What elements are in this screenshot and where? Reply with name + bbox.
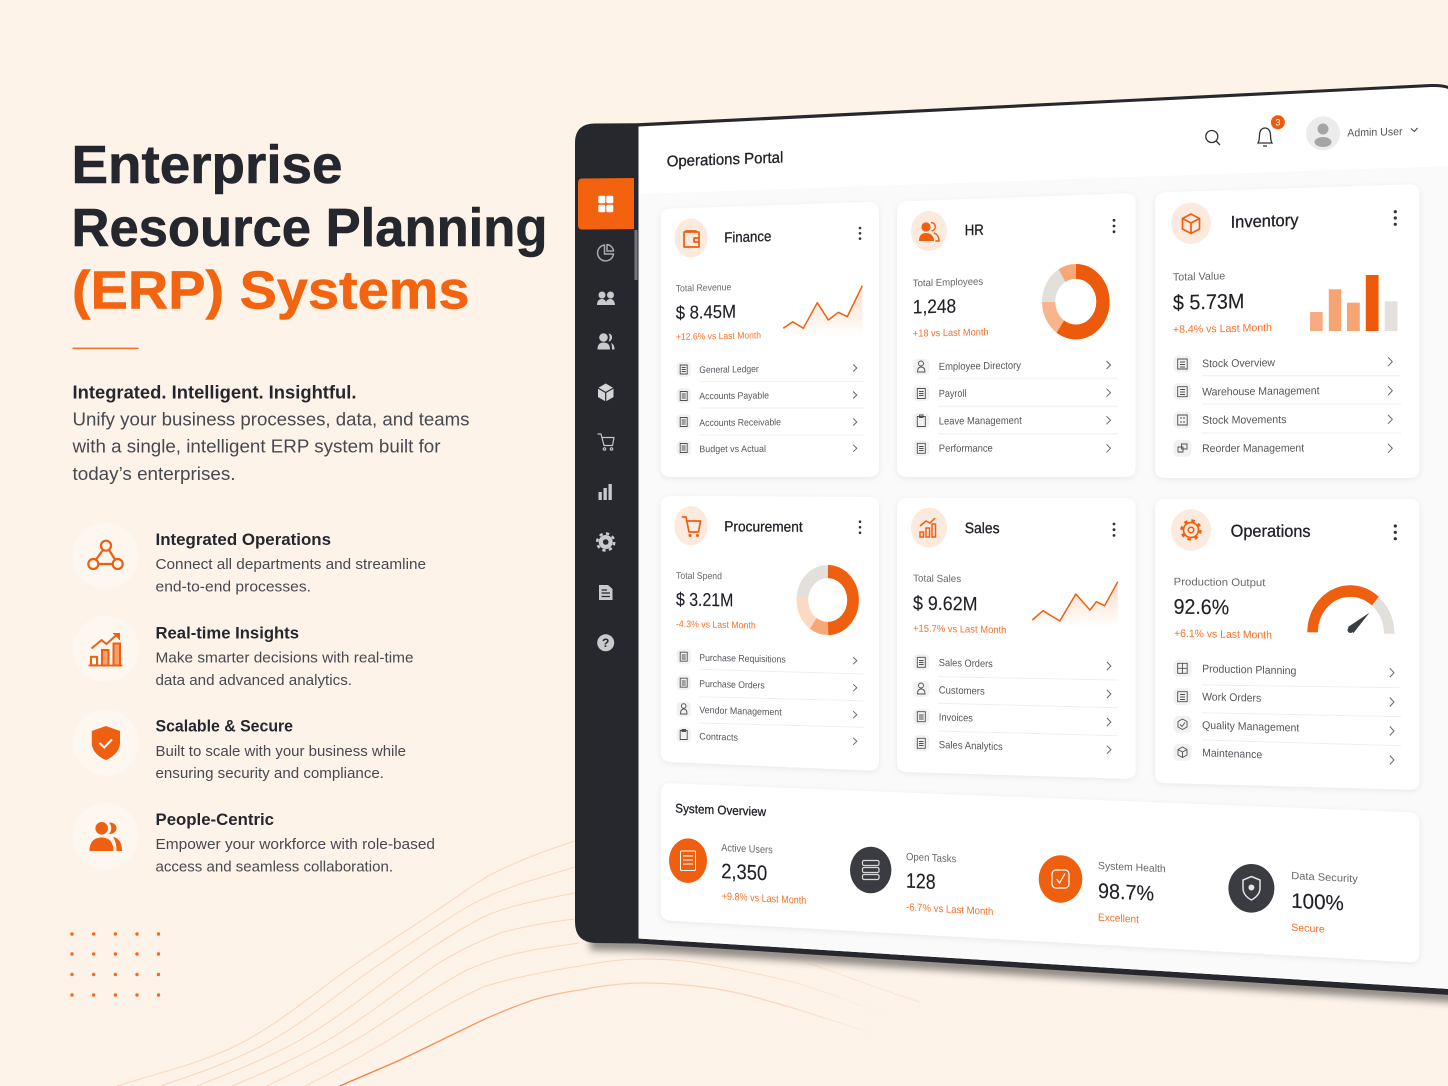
stat: Active Users	[669, 838, 806, 907]
panel: Finance: $ 8.45M	[676, 301, 736, 323]
panel: HR: Total Employees	[913, 277, 983, 289]
feature: People-Centric: access and seamless collaboration.	[156, 858, 393, 876]
panel: Inventory	[1155, 184, 1420, 478]
feature: Real-time Insights: data and advanced analytics.	[156, 672, 352, 689]
top bar	[667, 115, 1418, 170]
title: (ERP) Systems	[72, 260, 470, 320]
active nav tile	[578, 178, 634, 230]
row: Leave Management	[913, 413, 1110, 429]
main content surface	[638, 87, 1448, 989]
menu dots	[859, 520, 861, 534]
row: Warehouse Management: Warehouse Management	[1202, 385, 1319, 398]
menu dots	[859, 227, 861, 240]
icon: stacked list	[850, 847, 891, 893]
panel: Sales: +15.7% vs Last Month	[913, 624, 1006, 636]
panel: Inventory: $ 5.73M	[1173, 290, 1244, 315]
donut chart: spend	[802, 572, 853, 628]
row: Purchase Orders	[677, 675, 857, 692]
feature: People-Centric: Empower your workforce with role-based	[156, 836, 435, 853]
row: Purchase Requisitions: Purchase Requisitions	[699, 653, 786, 666]
icon: notification bell: 3	[1275, 118, 1280, 128]
intro text: Unify your business processes, data, and teams	[72, 410, 470, 430]
row: Production Planning	[1174, 660, 1394, 677]
row: Quality Management	[1174, 716, 1394, 736]
icon: people	[90, 822, 122, 851]
panel: Inventory: Total Value	[1173, 270, 1225, 284]
row: Work Orders	[1174, 688, 1394, 706]
sparkline	[783, 286, 862, 336]
icon: team exchange	[597, 292, 615, 305]
row: Accounts Payable	[677, 388, 857, 403]
gauge chart	[1313, 590, 1389, 634]
panel: HR	[897, 193, 1136, 477]
stat: Open Tasks: Open Tasks	[906, 851, 956, 865]
row: Customers: Customers	[939, 685, 985, 698]
row: Stock Movements: Stock Movements	[1202, 414, 1287, 427]
row: Maintenance	[1174, 744, 1394, 764]
row: Budget vs Actual	[677, 440, 857, 456]
panel: Procurement	[661, 496, 879, 771]
icon: gear	[1171, 509, 1211, 551]
stat: Active Users: 2,350	[721, 860, 767, 885]
row: Invoices	[913, 709, 1111, 726]
decorative dot grid	[70, 932, 160, 997]
panel: Finance	[661, 202, 879, 477]
icon: help: ?	[602, 636, 609, 650]
stat: Open Tasks	[850, 847, 993, 918]
row: Stock Overview: Stock Overview	[1202, 357, 1275, 370]
feature: Real-time Insights: Real-time Insights	[156, 623, 299, 642]
feature: Integrated Operations	[73, 523, 426, 596]
intro text	[71, 382, 470, 484]
feature: People-Centric: People-Centric	[156, 810, 274, 829]
icon: sales chart	[911, 508, 947, 548]
stat: Active Users: Active Users	[721, 842, 773, 856]
row: Accounts Payable: Accounts Payable	[699, 390, 769, 402]
row: Performance	[913, 440, 1110, 456]
icon: connected nodes	[88, 541, 123, 569]
panel: Procurement: $ 3.21M	[676, 589, 733, 610]
row: Stock Movements	[1174, 412, 1392, 428]
icon: shield	[92, 726, 120, 760]
panel: HR: HR	[965, 222, 984, 239]
feature: People-Centric	[73, 803, 435, 876]
user menu chevron	[1411, 128, 1418, 132]
panel: Operations: Operations	[1231, 522, 1311, 541]
panel: Procurement: Procurement	[724, 519, 803, 536]
panel: Operations	[1155, 499, 1420, 790]
dashboard window	[575, 84, 1448, 1003]
panel: Sales	[897, 498, 1136, 779]
row: Warehouse Management	[1174, 383, 1392, 400]
sparkline	[1032, 582, 1118, 627]
icon: wallet	[674, 218, 708, 258]
stat: Active Users: +9.8% vs Last Month	[722, 891, 806, 907]
panel: Inventory: Inventory	[1231, 211, 1299, 232]
row: Budget vs Actual: Budget vs Actual	[699, 444, 766, 455]
icon: gear	[597, 534, 614, 550]
feature: Scalable & Secure	[73, 710, 406, 782]
row: General Ledger: General Ledger	[699, 364, 759, 376]
icon: growth bars	[88, 634, 122, 666]
feature: Scalable & Secure: Scalable & Secure	[156, 717, 293, 736]
stat: Data Security: Data Security	[1291, 870, 1359, 885]
icon: cart	[598, 434, 614, 450]
intro text: with a single, intelligent ERP system built for	[71, 436, 441, 456]
feature: Scalable & Secure: Built to scale with your business while	[156, 743, 406, 760]
row: Reorder Management: Reorder Management	[1202, 442, 1304, 455]
row: Leave Management: Leave Management	[939, 416, 1022, 427]
row: Sales Orders: Sales Orders	[939, 658, 993, 670]
icon: users	[598, 333, 614, 350]
row: Production Planning: Production Planning	[1202, 663, 1296, 677]
panel: HR: +18 vs Last Month	[913, 327, 989, 340]
stat: Open Tasks: 128	[906, 870, 936, 894]
row: Reorder Management	[1174, 440, 1392, 457]
icon: search	[1206, 130, 1220, 145]
row: Work Orders: Work Orders	[1202, 691, 1262, 705]
menu dots	[1113, 523, 1115, 537]
intro text: Integrated. Intelligent. Insightful.	[72, 382, 356, 402]
menu dots	[1394, 524, 1397, 540]
stat: Data Security: 100%	[1291, 890, 1344, 915]
panel: Inventory: +8.4% vs Last Month	[1173, 322, 1272, 336]
row: Sales Analytics	[913, 735, 1111, 754]
panel: Sales: Sales	[965, 520, 1000, 537]
row: Accounts Receivable	[677, 414, 857, 429]
feature: Integrated Operations: Integrated Operations	[156, 530, 331, 549]
row: Employee Directory: Employee Directory	[939, 361, 1022, 373]
panel: HR: 1,248	[913, 296, 956, 318]
feature: Real-time Insights	[73, 616, 413, 689]
title	[72, 135, 548, 320]
panel: Sales: $ 9.62M	[913, 593, 978, 615]
panel: Operations: Production Output	[1174, 576, 1265, 589]
icon: people	[911, 211, 947, 251]
icon: notification bell	[1258, 115, 1285, 146]
row: Stock Overview	[1174, 356, 1392, 372]
row: Contracts	[677, 728, 857, 745]
icon: bars	[598, 484, 612, 500]
row: Performance: Performance	[939, 444, 993, 455]
page heading: Operations Portal	[667, 149, 783, 170]
user avatar	[1306, 116, 1340, 150]
panel: Sales: Total Sales	[913, 574, 961, 585]
panel: Operations: +6.1% vs Last Month	[1174, 628, 1272, 642]
panel: Finance: +12.6% vs Last Month	[676, 330, 761, 343]
icon: document	[599, 585, 612, 600]
row: Maintenance: Maintenance	[1202, 747, 1262, 761]
row: Payroll: Payroll	[939, 389, 966, 400]
panel: System Overview	[661, 783, 1419, 962]
row: Payroll	[913, 385, 1110, 401]
user name: Admin User	[1347, 126, 1403, 139]
bar chart	[1310, 275, 1398, 331]
icon: help	[597, 634, 614, 651]
row: Employee Directory	[913, 359, 1110, 375]
stat: System Health: System Health	[1098, 860, 1166, 875]
row: Invoices: Invoices	[939, 713, 973, 724]
stat: System Health	[1039, 855, 1166, 926]
row: Purchase Orders: Purchase Orders	[699, 679, 765, 692]
window frame	[575, 84, 1448, 995]
stat: Data Security: Secure	[1291, 922, 1325, 936]
row: Purchase Requisitions	[677, 649, 857, 666]
title: Enterprise	[72, 135, 342, 195]
stat: Open Tasks: -6.7% vs Last Month	[906, 901, 993, 918]
stat: Data Security	[1228, 864, 1359, 936]
panel: System Overview: System Overview	[675, 801, 767, 819]
icon: list document	[669, 838, 707, 883]
icon: box	[1171, 203, 1211, 244]
panel: Procurement: -4.3% vs Last Month	[676, 619, 756, 631]
title: Resource Planning	[72, 198, 548, 258]
feature: Real-time Insights: Make smarter decisions with real-time	[156, 650, 414, 666]
row: Vendor Management	[677, 702, 857, 718]
row: Contracts: Contracts	[699, 731, 738, 744]
feature: Integrated Operations: end-to-end processes.	[156, 578, 311, 596]
sidebar navigation	[578, 178, 638, 651]
title divider	[72, 348, 138, 349]
gauge needle	[1348, 613, 1369, 633]
panel: Operations: 92.6%	[1174, 596, 1229, 619]
icon: cart	[674, 506, 708, 545]
icon: security shield	[1228, 864, 1274, 913]
row: Accounts Receivable: Accounts Receivable	[699, 417, 781, 429]
row: Quality Management: Quality Management	[1202, 720, 1299, 735]
icon: box	[598, 384, 614, 402]
panel: Finance: Finance	[724, 229, 771, 246]
stat: System Health: 98.7%	[1098, 880, 1154, 906]
background wave lines	[117, 841, 920, 1086]
icon: dashboard grid	[598, 196, 613, 212]
feature: Scalable & Secure: ensuring security and compliance.	[156, 765, 384, 782]
row: Sales Orders	[913, 654, 1111, 670]
menu dots	[1113, 219, 1115, 233]
panel: Finance: Total Revenue	[676, 282, 731, 295]
row: Sales Analytics: Sales Analytics	[939, 740, 1003, 753]
intro text: today’s enterprises.	[72, 464, 236, 484]
donut chart: employees	[1049, 271, 1103, 332]
row: Vendor Management: Vendor Management	[699, 705, 782, 718]
stat: System Health: Excellent	[1098, 912, 1139, 926]
feature: Integrated Operations: Connect all departments and streamline	[156, 556, 426, 573]
icon: health check	[1039, 855, 1082, 903]
menu dots	[1394, 210, 1397, 226]
panel: Procurement: Total Spend	[676, 571, 722, 582]
icon: pie chart	[598, 244, 614, 261]
row: General Ledger	[677, 362, 857, 377]
row: Customers	[913, 681, 1111, 698]
